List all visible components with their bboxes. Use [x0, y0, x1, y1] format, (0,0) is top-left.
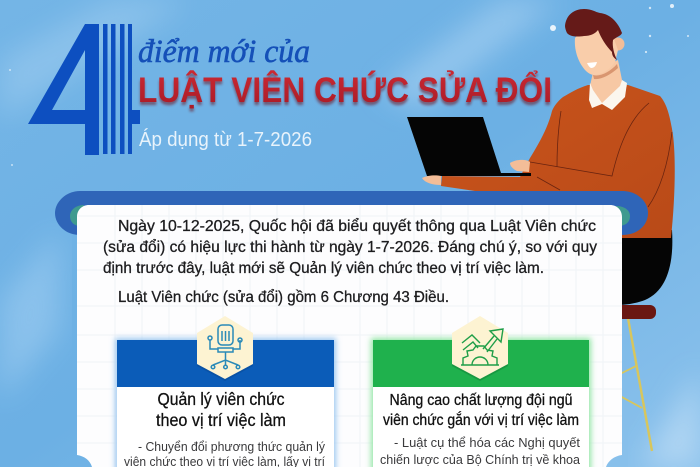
shirt collar	[589, 80, 627, 110]
blue panel header	[117, 340, 334, 387]
panel heading: viên chức gắn với vị trí việc làm	[383, 412, 579, 429]
panel body text: - Chuyển đổi phương thức quản lý	[138, 439, 325, 454]
hands	[422, 160, 530, 185]
hexagon icon: growth gear	[452, 316, 508, 381]
trousers	[600, 230, 672, 305]
hexagon icon: office chair	[197, 316, 253, 381]
panel heading: Quản lý viên chức	[158, 389, 285, 409]
panel body text: - Luật cụ thể hóa các Nghị quyết	[394, 435, 580, 450]
teal corner right	[616, 206, 630, 226]
panel: manage by job position	[115, 316, 336, 467]
panel heading	[156, 389, 286, 430]
big number 4	[28, 24, 140, 155]
panel heading	[383, 392, 579, 429]
laptop	[407, 117, 531, 176]
main title: LUẬT VIÊN CHỨC SỬA ĐỔI	[138, 73, 552, 113]
face	[575, 28, 624, 75]
neck	[590, 60, 627, 104]
intro paragraph: Luật Viên chức (sửa đổi) gồm 6 Chương 43 Điều.	[118, 288, 449, 306]
intro paragraph: định trước đây, luật mới sẽ Quản lý viên chức theo vị trí việc làm.	[103, 260, 544, 277]
illustration: man with laptop	[407, 9, 675, 451]
intro paragraph	[103, 217, 597, 306]
intro paragraph: Ngày 10-12-2025, Quốc hội đã biểu quyết thông qua Luật Viên chức	[118, 217, 596, 235]
green panel header	[373, 340, 589, 387]
panel: improving staff quality	[371, 316, 591, 467]
intro paragraph: (sửa đổi) có hiệu lực thi hành từ ngày 1-7-2026. Đáng chú ý, so với quy	[103, 238, 597, 256]
main white card	[77, 205, 622, 467]
title script line: điểm mới của	[138, 34, 310, 70]
sweater	[441, 85, 675, 238]
panel body text: chiến lược của Bộ Chính trị về khoa	[380, 452, 581, 467]
hair	[565, 9, 622, 60]
teal corner left	[70, 205, 84, 226]
panel body text	[124, 439, 325, 467]
blue banner behind card	[55, 191, 648, 235]
panel heading: Nâng cao chất lượng đội ngũ	[390, 392, 572, 409]
subtitle: Áp dụng từ 1-7-2026	[139, 128, 312, 151]
panel heading: theo vị trí việc làm	[156, 410, 286, 430]
stool	[600, 305, 656, 451]
panel body text	[380, 435, 581, 467]
main title: LUẬT VIÊN CHỨC SỬA ĐỔI	[138, 70, 552, 110]
